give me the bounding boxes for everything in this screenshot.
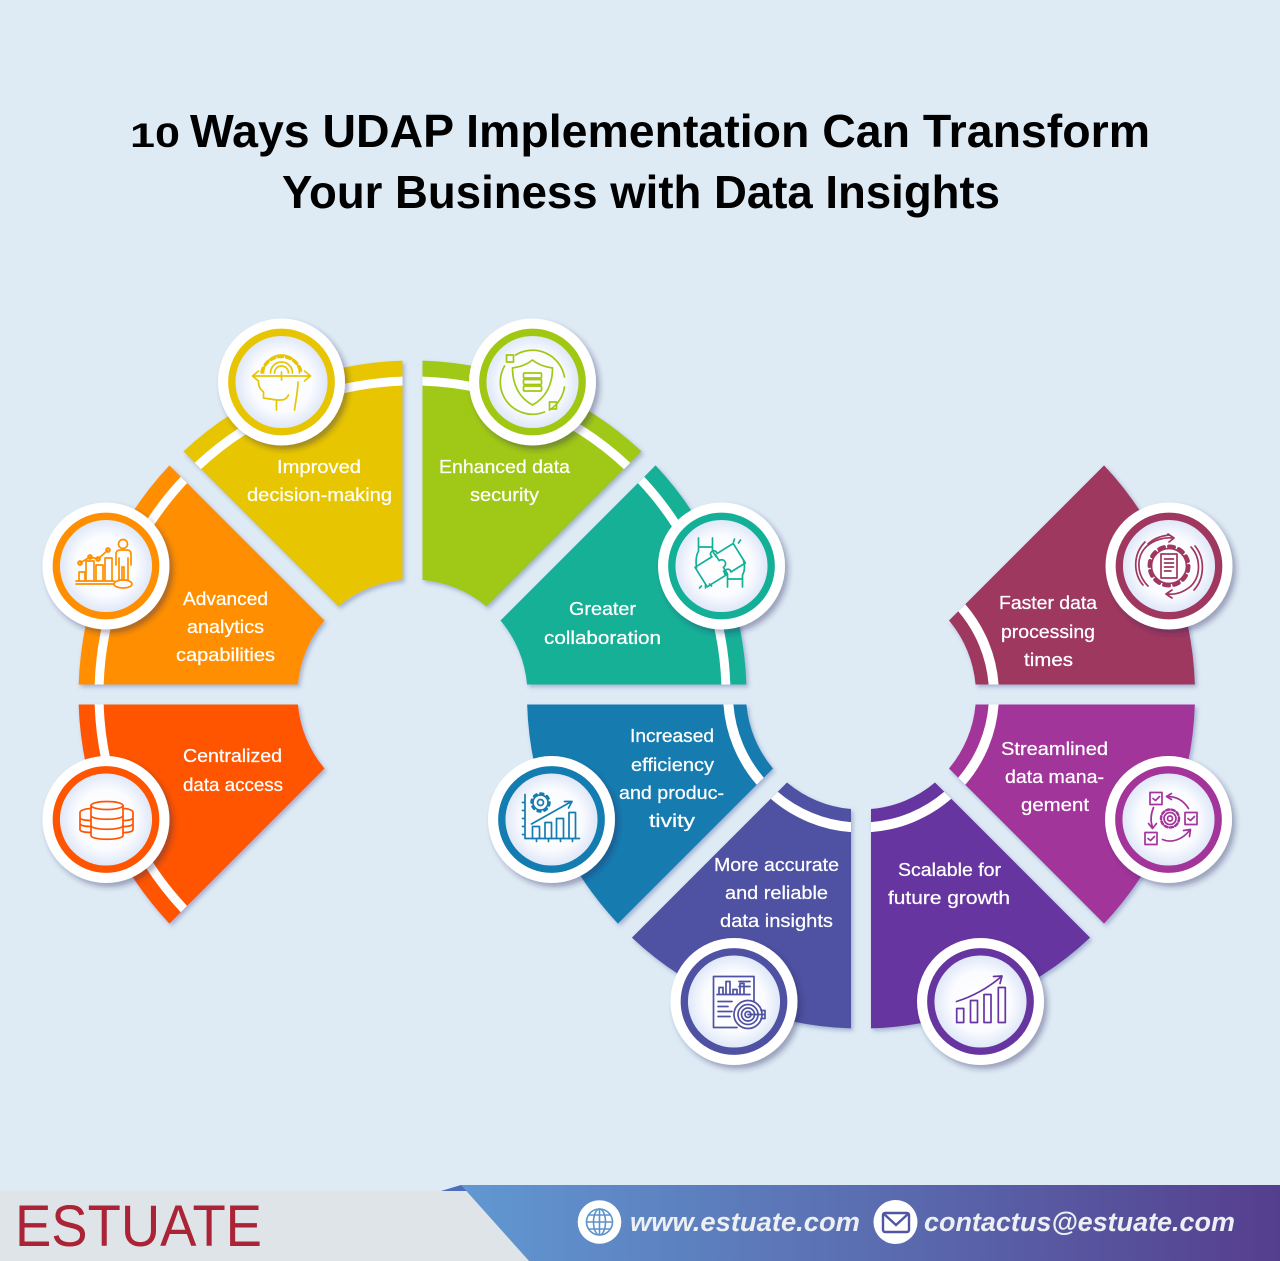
- label: increased efficiency and productivity: tivity: [649, 810, 696, 831]
- icon: puzzle pieces and hands: [658, 502, 785, 630]
- label: advanced analytics capabilities: Advanced: [183, 588, 268, 609]
- label: improved decision-making: decision-making: [247, 484, 392, 505]
- panel: scalable for future growth: [871, 782, 1090, 1065]
- label: advanced analytics capabilities: [176, 588, 275, 665]
- label: increased efficiency and productivity: and produc-: [619, 782, 724, 803]
- label: streamlined data management: [1001, 738, 1108, 815]
- icon: envelope: [874, 1200, 918, 1244]
- website: www.estuate.com: [630, 1207, 860, 1237]
- segment: yellow: [183, 361, 402, 606]
- label: more accurate and reliable data insights: and reliable: [725, 882, 828, 903]
- label: greater collaboration: Greater: [569, 598, 636, 619]
- panel: centralized data access: [42, 704, 324, 924]
- label: more accurate and reliable data insights: data insights: [720, 910, 833, 931]
- title: Your Business with Data Insights: [282, 166, 1000, 218]
- label: greater collaboration: [544, 598, 661, 648]
- icon: report with target: [670, 938, 798, 1065]
- segment: purple: [871, 782, 1090, 1028]
- segment: blue: [527, 704, 773, 924]
- label: enhanced data security: Enhanced data: [439, 456, 571, 477]
- label: enhanced data security: security: [470, 484, 540, 505]
- panel: greater collaboration: [500, 465, 785, 684]
- label: faster data processing times: times: [1024, 649, 1073, 670]
- label: faster data processing times: processing: [1001, 621, 1095, 642]
- panel: streamlined data management: [949, 704, 1232, 924]
- segment: indigo: [632, 782, 851, 1028]
- label: centralized data access: Centralized: [183, 745, 282, 766]
- label: advanced analytics capabilities: analytics: [187, 616, 264, 637]
- label: increased efficiency and productivity: Increased: [630, 725, 714, 746]
- label: increased efficiency and productivity: [619, 725, 724, 831]
- label: more accurate and reliable data insights: More accurate: [714, 854, 839, 875]
- icon: gear with document and cycle arrows: [1106, 502, 1232, 630]
- segment: orange: [79, 465, 325, 684]
- label: advanced analytics capabilities: capabilities: [176, 644, 275, 665]
- label: increased efficiency and productivity: efficiency: [631, 754, 715, 775]
- title: 10: [130, 117, 180, 155]
- segment: maroon: [949, 465, 1195, 684]
- label: streamlined data management: data mana-: [1005, 766, 1104, 787]
- panel: more accurate and reliable data insights: [632, 782, 851, 1065]
- icon: workflow gear and checkboxes: [1105, 756, 1232, 883]
- label: faster data processing times: Faster data: [999, 592, 1098, 613]
- label: faster data processing times: [999, 592, 1098, 670]
- label: improved decision-making: [247, 456, 392, 505]
- segment: red-orange: [79, 704, 325, 924]
- icon: gear and bar chart with arrow: [488, 756, 615, 883]
- panel: advanced analytics capabilities: [42, 465, 324, 684]
- label: scalable for future growth: [888, 859, 1010, 908]
- label: more accurate and reliable data insights: [714, 854, 839, 931]
- segment: teal: [500, 465, 746, 684]
- label: scalable for future growth: future growth: [888, 887, 1010, 908]
- label: scalable for future growth: Scalable for: [898, 859, 1001, 880]
- icon: database: [42, 756, 170, 883]
- title: Ways UDAP Implementation Can Transform: [190, 105, 1150, 157]
- icon: shield with server: [469, 318, 596, 446]
- label: centralized data access: data access: [183, 774, 283, 795]
- label: improved decision-making: Improved: [277, 456, 361, 477]
- panel: improved decision-making: [183, 318, 402, 606]
- email: contactus@estuate.com: [924, 1207, 1235, 1237]
- panel: faster data processing times: [949, 465, 1232, 684]
- label: centralized data access: [183, 745, 283, 795]
- segment: green: [422, 361, 642, 606]
- label: greater collaboration: collaboration: [544, 627, 661, 648]
- logo: estuate: ESTUATE: [15, 1194, 262, 1259]
- footer band: [0, 1185, 1280, 1261]
- icon: analytics chart and person: [42, 502, 170, 630]
- label: enhanced data security: [439, 456, 571, 505]
- title: [130, 105, 1150, 218]
- label: streamlined data management: gement: [1021, 794, 1089, 815]
- icon: gear and head: [218, 318, 345, 446]
- segment: magenta: [949, 704, 1195, 924]
- icon: growth bars: [917, 938, 1044, 1065]
- panel: increased efficiency and productivity: [488, 704, 773, 924]
- icon: globe: [578, 1200, 621, 1244]
- panel: enhanced data security: [422, 318, 642, 606]
- label: streamlined data management: Streamlined: [1001, 738, 1108, 759]
